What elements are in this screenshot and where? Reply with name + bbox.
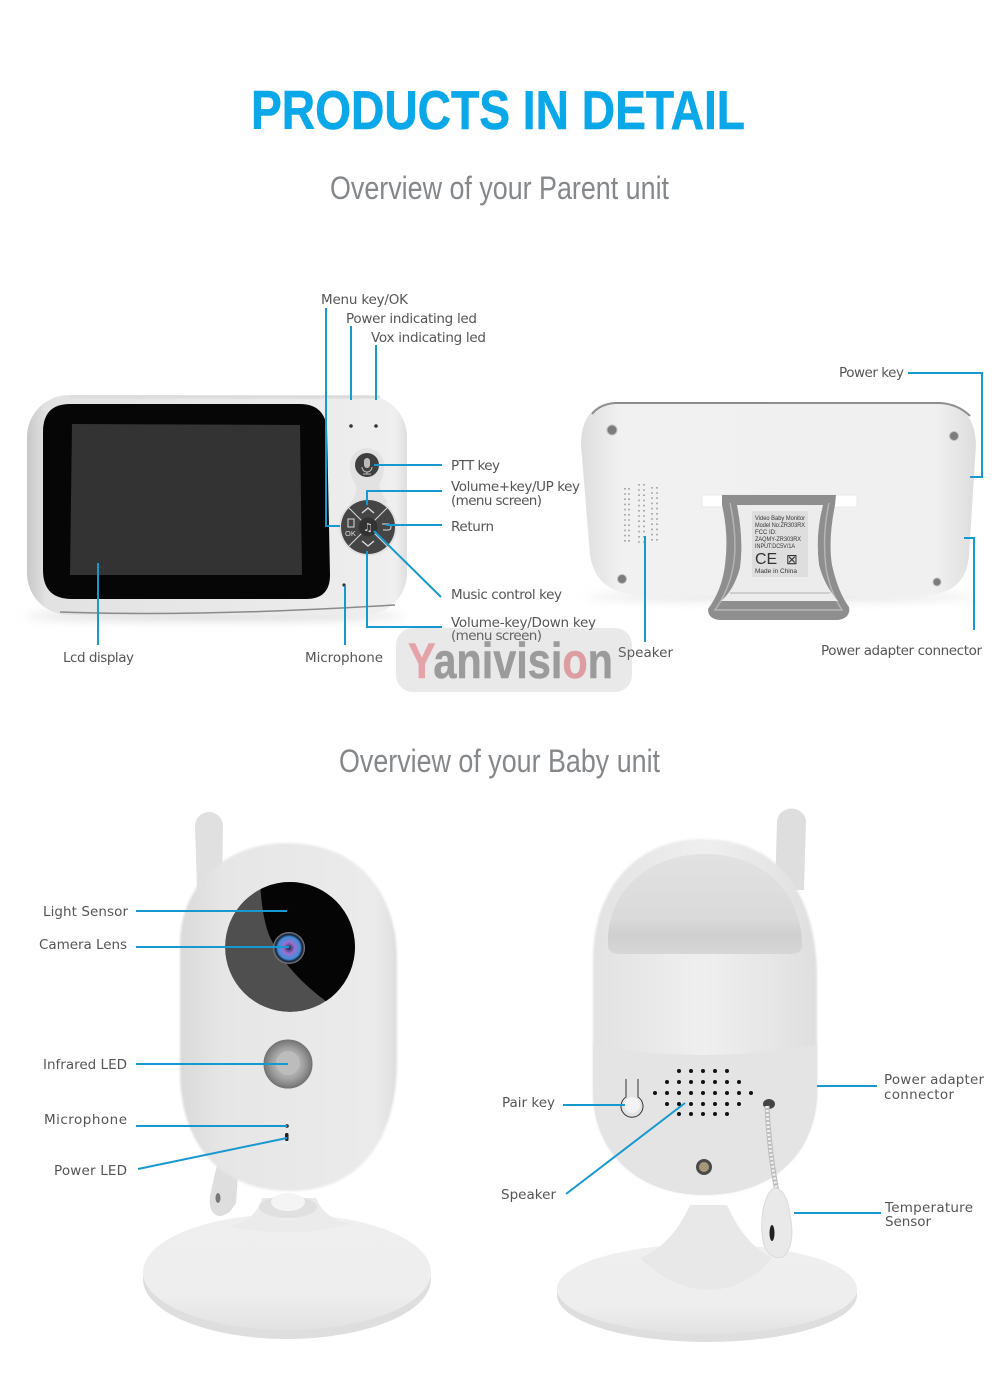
parent unit labels: Volume+key/UP key [451, 479, 580, 495]
speaker holes [625, 484, 657, 546]
ptt key [348, 448, 388, 507]
heading: baby unit: Overview of your Baby unit [339, 743, 660, 779]
lower body band [593, 1045, 817, 1195]
parent unit labels: Menu key/OK [321, 292, 409, 308]
neck mount [228, 1198, 352, 1233]
baby unit back labels: Power adapter [884, 1072, 984, 1088]
parent unit front device [25, 395, 407, 620]
neck mount [640, 1205, 772, 1290]
heading: parent unit: Overview of your Parent unit [330, 170, 669, 206]
baby unit back labels: connector [884, 1087, 954, 1103]
antenna [195, 812, 223, 890]
body [593, 839, 817, 1195]
watermark: Yanivision [408, 633, 613, 689]
bracket flap [608, 854, 802, 954]
parent unit labels: Music control key [451, 587, 562, 603]
sensor cable [763, 1099, 777, 1192]
parent unit labels: Lcd display [63, 650, 134, 666]
baby unit front labels: Camera Lens [39, 937, 127, 953]
parent unit labels: Power key [839, 365, 904, 381]
parent unit labels: Microphone [305, 650, 383, 666]
rating label: INPUT:DC5V/1A [755, 544, 795, 550]
parent unit labels: Speaker [618, 645, 673, 661]
lcd screen [70, 424, 302, 575]
infrared led [263, 1039, 313, 1089]
parent unit labels: Power indicating led [346, 311, 477, 327]
antenna [775, 809, 806, 890]
parent unit labels: PTT key [451, 458, 500, 474]
baby unit front camera [143, 812, 431, 1339]
pair key [621, 1079, 643, 1117]
rating label: Model No:ZR303RX [755, 523, 805, 529]
baby unit back labels: Pair key [502, 1095, 555, 1111]
parent unit labels: (menu screen) [451, 493, 542, 509]
rating label: ⊠ [786, 551, 798, 567]
rating label: Video Baby Monitor [755, 516, 805, 522]
baby unit back labels [501, 1072, 984, 1230]
parent unit callout lines [98, 308, 982, 645]
parent unit labels: Vox indicating led [371, 330, 486, 346]
d-pad [339, 498, 397, 556]
baby unit back callout lines [563, 1086, 881, 1213]
rating label: Made in China [755, 569, 798, 575]
led dots [342, 424, 378, 587]
speaker holes [653, 1069, 753, 1116]
parent unit labels: Volume-key/Down key [451, 615, 596, 631]
rating label: ZAQMY-ZR303RX [755, 537, 801, 543]
camera disk [225, 880, 360, 1012]
baby unit front labels: Power LED [54, 1163, 127, 1179]
temperature sensor [762, 1188, 792, 1258]
baby unit back camera [557, 809, 857, 1342]
baby unit front labels: Microphone [44, 1112, 127, 1128]
title: PRODUCTS IN DETAIL [251, 79, 745, 141]
rating label [752, 511, 808, 577]
parent unit labels: (menu screen) [451, 628, 542, 644]
parent unit labels [63, 292, 982, 666]
d-pad: ♫ [363, 521, 373, 534]
stand pins [702, 495, 857, 507]
baby unit front labels: Light Sensor [43, 904, 128, 920]
parent unit back device [581, 402, 976, 620]
base [557, 1248, 857, 1342]
screw [696, 1159, 712, 1175]
rating label: CE [755, 551, 777, 568]
screws [607, 425, 958, 586]
baby unit front labels: Infrared LED [43, 1057, 127, 1073]
base [143, 1219, 431, 1339]
kickstand [708, 495, 849, 620]
baby unit front labels [39, 904, 128, 1179]
parent unit labels: Power adapter connector [821, 643, 982, 659]
lcd bezel [43, 404, 330, 599]
d-pad: OK [345, 529, 356, 538]
parent unit labels: Return [451, 519, 494, 535]
baby unit back labels: Sensor [885, 1214, 931, 1230]
mic and led holes [285, 1124, 289, 1141]
baby unit back labels: Speaker [501, 1187, 556, 1203]
baby unit back labels: Temperature [884, 1200, 973, 1216]
rating label: FCC ID: [755, 530, 777, 536]
lens [273, 932, 305, 964]
body [180, 843, 397, 1191]
lower nub [210, 1165, 238, 1216]
baby unit front callout lines [136, 911, 289, 1169]
